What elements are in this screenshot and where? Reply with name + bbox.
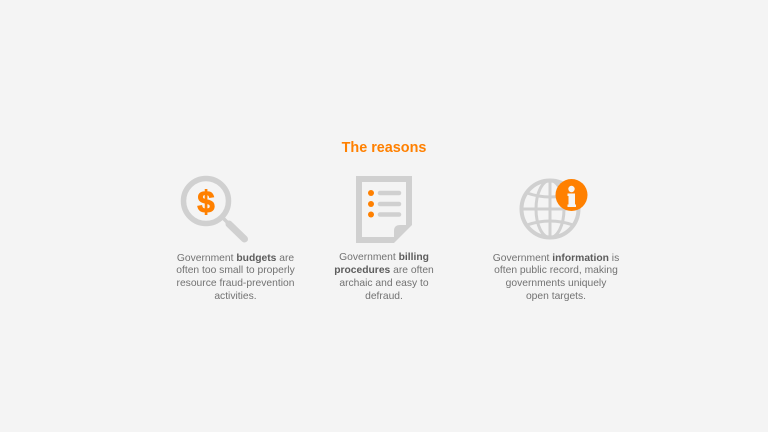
title: The reasons	[342, 140, 426, 156]
text: public information: governments uniquely	[506, 278, 606, 289]
text: budgets: activities.	[214, 291, 257, 302]
text: public information	[493, 252, 619, 302]
text: public information: often public record, making	[494, 265, 618, 276]
text: budgets	[176, 252, 295, 302]
text: billing procedures: archaic and easy to	[339, 278, 429, 289]
icon: magnifying glass with dollar sign: $	[197, 184, 215, 219]
text: budgets: resource fraud-prevention	[177, 278, 294, 289]
text: budgets: Government budgets are	[177, 252, 294, 264]
text: billing procedures: Government billing	[339, 252, 429, 263]
icon: magnifying glass with dollar sign	[180, 176, 248, 242]
icon: globe with info badge	[520, 178, 588, 240]
text: billing procedures: defraud.	[365, 291, 403, 302]
text: budgets: often too small to properly	[176, 265, 295, 276]
text: public information: open targets.	[526, 291, 586, 302]
icon: document with list	[356, 176, 412, 243]
text: billing procedures: procedures are often	[334, 265, 434, 276]
text: billing procedures	[334, 252, 434, 302]
text: public information: Government information is	[493, 252, 619, 264]
